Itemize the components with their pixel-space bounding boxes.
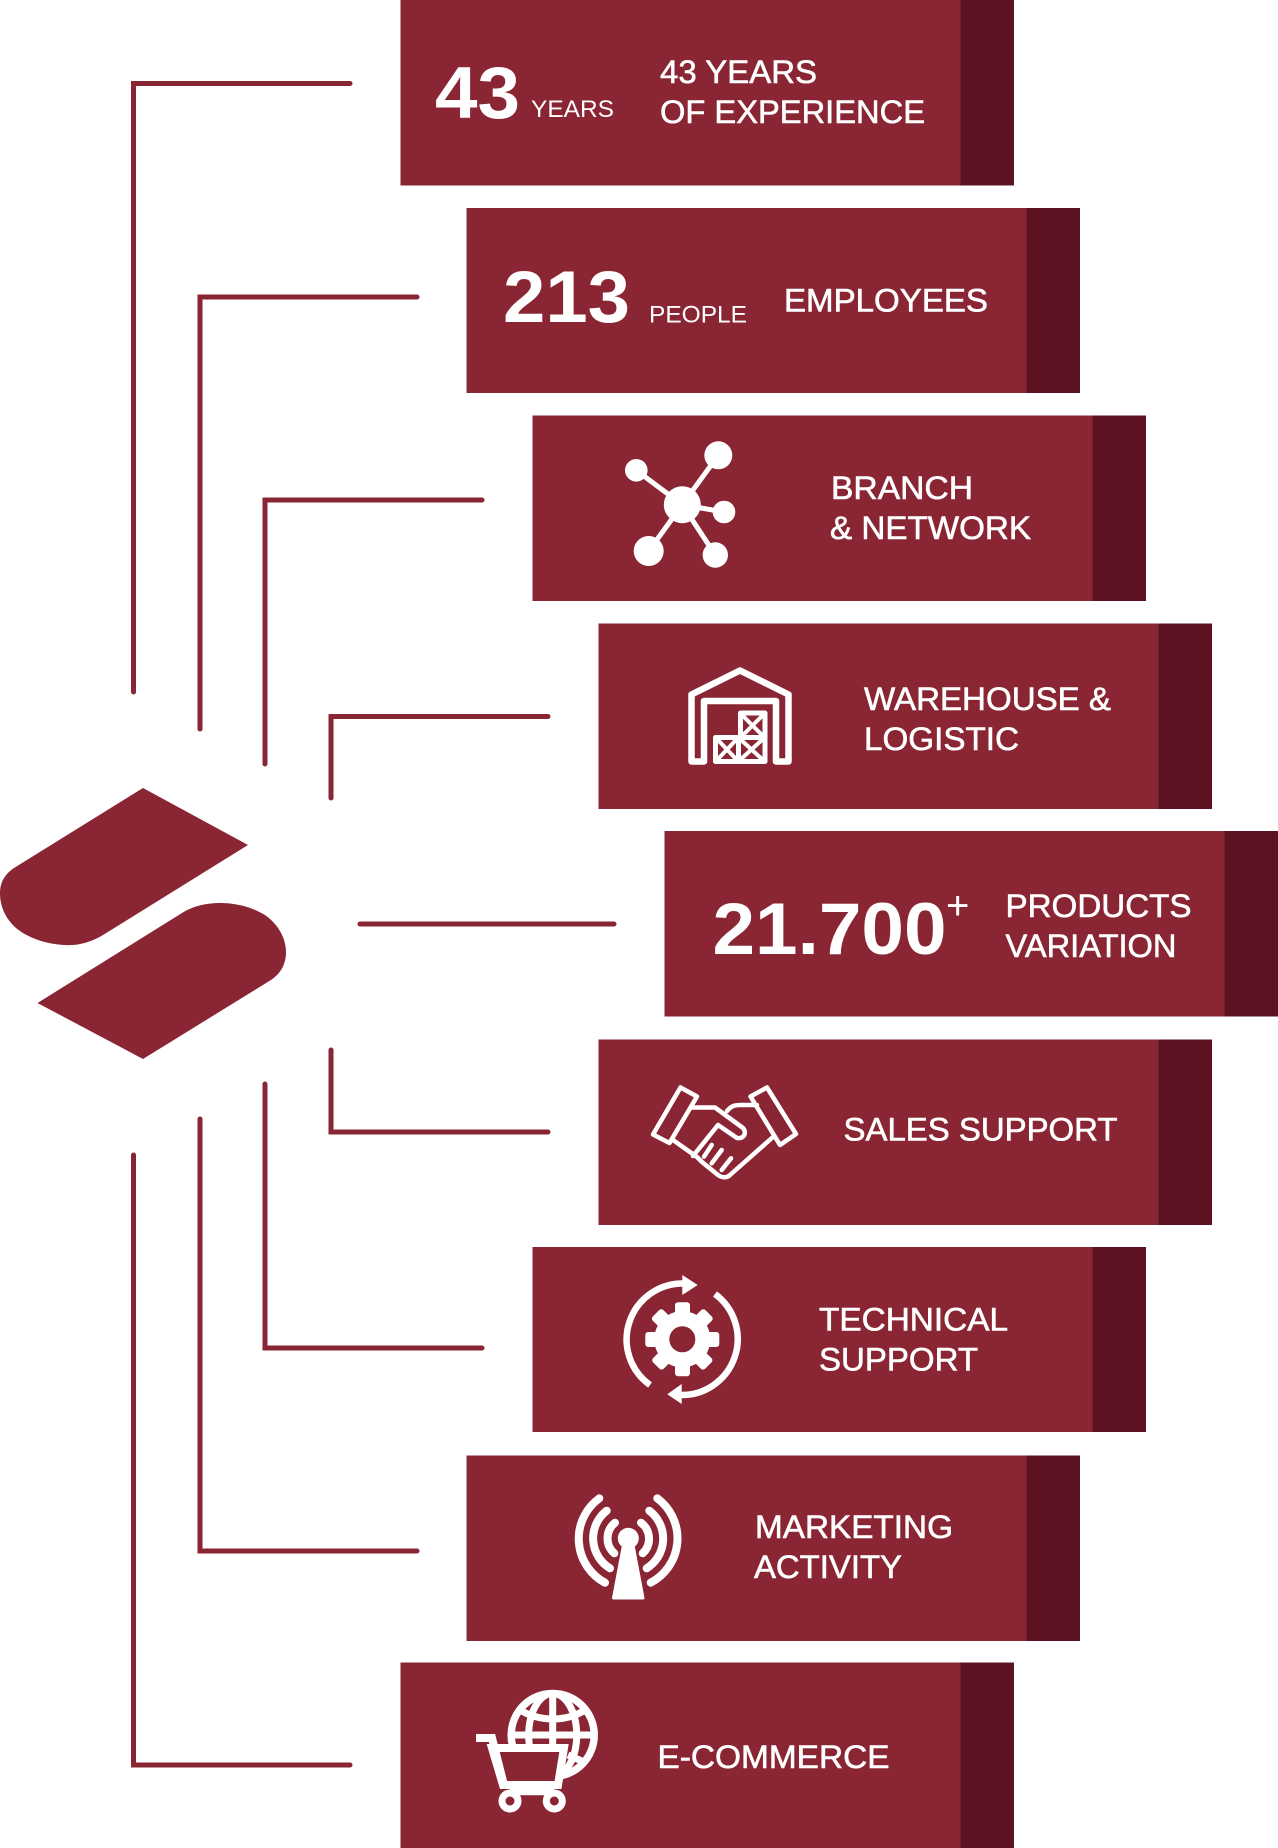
logo <box>0 788 286 1059</box>
stat: 43 years: 43 <box>435 53 520 134</box>
connector lines <box>134 84 614 1765</box>
label: 43 years of experience <box>660 54 925 130</box>
label: sales support: SALES SUPPORT <box>844 1112 1118 1148</box>
stat: 213 people <box>503 257 747 338</box>
panel: branch and network <box>532 416 1146 601</box>
label: products variation: PRODUCTS <box>1006 888 1192 924</box>
label: e-commerce: E-COMMERCE <box>658 1739 890 1775</box>
label: technical support <box>819 1302 1008 1378</box>
panel: sales support <box>598 1040 1212 1225</box>
label: branch and network: & NETWORK <box>830 510 1031 546</box>
icon: gear with arrows <box>627 1275 738 1404</box>
panel: warehouse and logistic <box>598 624 1212 809</box>
icon: handshake <box>653 1088 796 1177</box>
icon: cart and globe <box>476 1694 594 1809</box>
label: branch and network <box>830 470 1031 546</box>
label: products variation <box>1006 888 1192 964</box>
icon: network <box>625 441 735 568</box>
panel: marketing activity <box>466 1456 1080 1641</box>
panel: e-commerce <box>400 1662 1014 1848</box>
label: technical support: SUPPORT <box>819 1342 978 1378</box>
label: marketing activity: MARKETING <box>755 1509 953 1545</box>
stat: 21.700+: 21.700 <box>712 889 946 970</box>
label: marketing activity <box>754 1509 953 1585</box>
stat: 43 years: YEARS <box>531 96 614 123</box>
stat: 21.700+: + <box>946 884 969 928</box>
label: warehouse and logistic <box>864 681 1111 757</box>
label: marketing activity: ACTIVITY <box>754 1549 902 1585</box>
label: warehouse and logistic: LOGISTIC <box>864 721 1019 757</box>
label: warehouse and logistic: WAREHOUSE & <box>864 681 1111 717</box>
label: branch and network: BRANCH <box>831 470 973 506</box>
panel: technical support <box>532 1247 1146 1432</box>
panel: employees <box>466 208 1080 393</box>
stat: 213 people: PEOPLE <box>649 302 747 328</box>
stat: 213 people: 213 <box>503 257 630 338</box>
icon: warehouse <box>692 670 788 762</box>
panel: products variation <box>664 831 1278 1016</box>
stat: 43 years <box>435 53 614 134</box>
label: products variation: VARIATION <box>1006 928 1176 964</box>
panel: 43 years <box>400 0 1014 186</box>
label: technical support: TECHNICAL <box>819 1302 1008 1338</box>
label: 43 years of experience: OF EXPERIENCE <box>660 94 925 130</box>
label: employees: EMPLOYEES <box>784 282 988 318</box>
icon: antenna <box>579 1498 677 1598</box>
label: 43 years of experience: 43 YEARS <box>660 54 817 90</box>
